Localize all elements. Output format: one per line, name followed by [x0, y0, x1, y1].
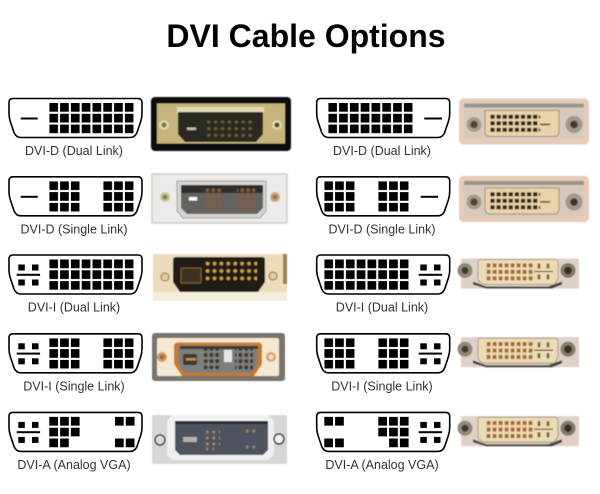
photo: grey framed DVI-I single link plug [152, 333, 285, 381]
diagram: DVI-A connector [9, 412, 142, 451]
label: DVI-I (Dual Link): DVI-I (Dual Link) [336, 300, 428, 314]
title: DVI Cable Options [166, 18, 446, 54]
panel: DVI-D single link, left [9, 173, 288, 236]
label: DVI-A (Analog VGA): DVI-A (Analog VGA) [17, 458, 131, 472]
photo: black and gold DVI-D dual link plug [151, 97, 291, 151]
photo: beige DVI-D single link socket [459, 176, 589, 222]
panel: DVI-I dual link, left [9, 254, 287, 314]
diagram: DVI-D dual link socket [317, 98, 450, 138]
photo: cream DVI-I dual link socket [458, 258, 579, 288]
photo: silver DVI-A plug [152, 415, 287, 464]
panel: DVI-D single link, right [317, 176, 589, 236]
panel: DVI-I single link, right [317, 334, 579, 394]
panel: DVI-D dual link, left [9, 97, 291, 158]
panel: DVI-I single link, left [9, 333, 285, 394]
panel: DVI-A analog VGA, left [9, 412, 287, 472]
photo: cream DVI-A socket [458, 416, 579, 446]
diagram: DVI-D single link connector [9, 177, 142, 216]
label: DVI-D (Dual Link): DVI-D (Dual Link) [25, 144, 123, 158]
label: DVI-I (Single Link): DVI-I (Single Link) [331, 380, 433, 394]
label: DVI-A (Analog VGA): DVI-A (Analog VGA) [325, 458, 439, 472]
diagram: DVI-D single link socket [317, 177, 450, 216]
label: DVI-I (Dual Link): DVI-I (Dual Link) [28, 300, 120, 314]
panel: DVI-I dual link, right [317, 255, 579, 314]
photo: cream DVI-I single link socket [458, 337, 579, 367]
label: DVI-D (Single Link): DVI-D (Single Link) [21, 222, 127, 236]
photo: cream and black DVI-I dual link plug [153, 254, 287, 301]
diagram: DVI-I dual link socket [317, 255, 450, 294]
diagram: DVI-A socket [317, 412, 450, 451]
photo: beige DVI-D dual link socket [459, 98, 589, 144]
photo: silver DVI-D single link plug [151, 173, 288, 224]
diagram: DVI-I single link socket [317, 334, 450, 373]
diagram: DVI-D dual link connector [9, 98, 142, 138]
label: DVI-I (Single Link): DVI-I (Single Link) [23, 380, 125, 394]
label: DVI-D (Single Link): DVI-D (Single Link) [329, 222, 435, 236]
panel: DVI-D dual link, right [317, 98, 589, 158]
diagram: DVI-I single link connector [9, 334, 142, 373]
diagram: DVI-I dual link connector [9, 255, 142, 294]
panel: DVI-A analog VGA, right [317, 412, 579, 472]
label: DVI-D (Dual Link): DVI-D (Dual Link) [333, 144, 431, 158]
